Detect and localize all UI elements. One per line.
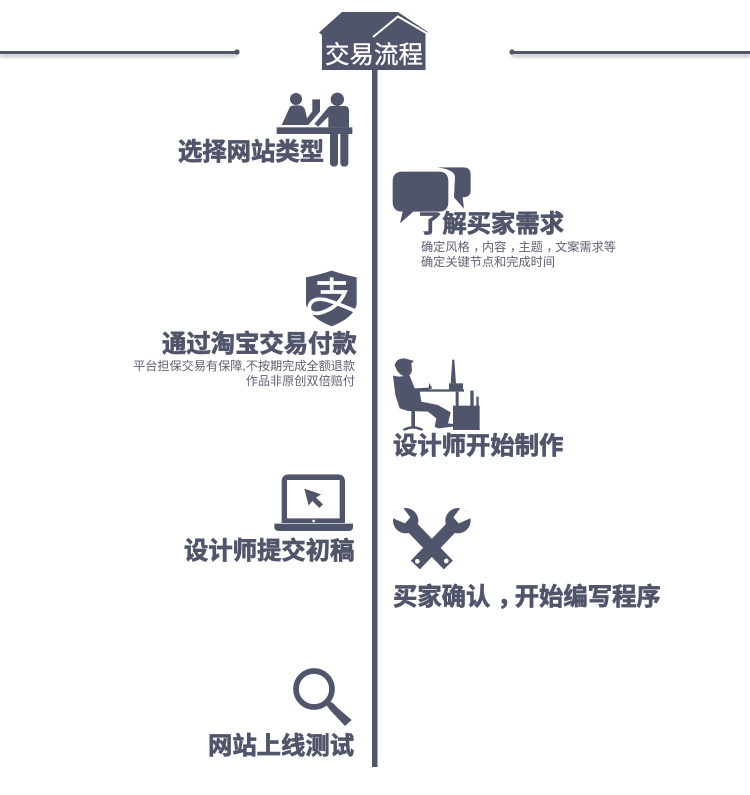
heading: buyer confirms: 买家确认 ，开始编写程序 [393, 584, 661, 611]
left header rule [0, 49, 240, 57]
heading: understand buyer needs: 了解买家需求 [418, 211, 564, 238]
text: payment details [133, 358, 355, 388]
title house [319, 12, 428, 70]
icon: crossed wrenches [391, 507, 473, 565]
title house: 交易流程 [325, 41, 423, 69]
icon: magnifier [296, 671, 352, 726]
text: payment details: 作品非原创双倍赔付 [246, 373, 355, 388]
icon: alipay shield [306, 271, 357, 326]
text: needs details [421, 239, 616, 269]
timeline pole [372, 68, 378, 767]
heading: designer starts: 设计师开始制作 [393, 433, 563, 460]
icon: speech bubbles [393, 167, 471, 223]
text: needs details: 确定关键节点和完成时间 [421, 254, 555, 269]
heading: choose site type: 选择网站类型 [178, 139, 324, 166]
heading: site launch test: 网站上线测试 [208, 733, 354, 760]
heading: pay via taobao: 通过淘宝交易付款 [162, 330, 357, 358]
text: payment details: 平台担保交易有保障,不按期完成全额退款 [133, 358, 355, 373]
heading: designer submits draft: 设计师提交初稿 [184, 537, 354, 565]
icon: laptop [274, 474, 353, 531]
right header rule [509, 49, 750, 57]
icon: designer at desk [393, 358, 480, 430]
text: needs details: 确定风格 ，内容 ，主题 ，文案需求等 [421, 239, 616, 254]
icon: two people at counter [277, 93, 352, 167]
